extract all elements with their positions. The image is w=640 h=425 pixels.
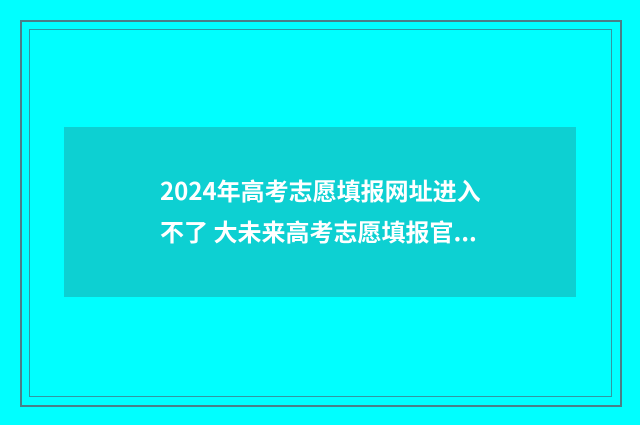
title line 1: 2024年高考志愿填报网址进入 [160,172,481,207]
inner frame [29,29,612,397]
panel: title background [64,127,576,297]
title line 2: 不了 大未来高考志愿填报官... [160,213,477,248]
